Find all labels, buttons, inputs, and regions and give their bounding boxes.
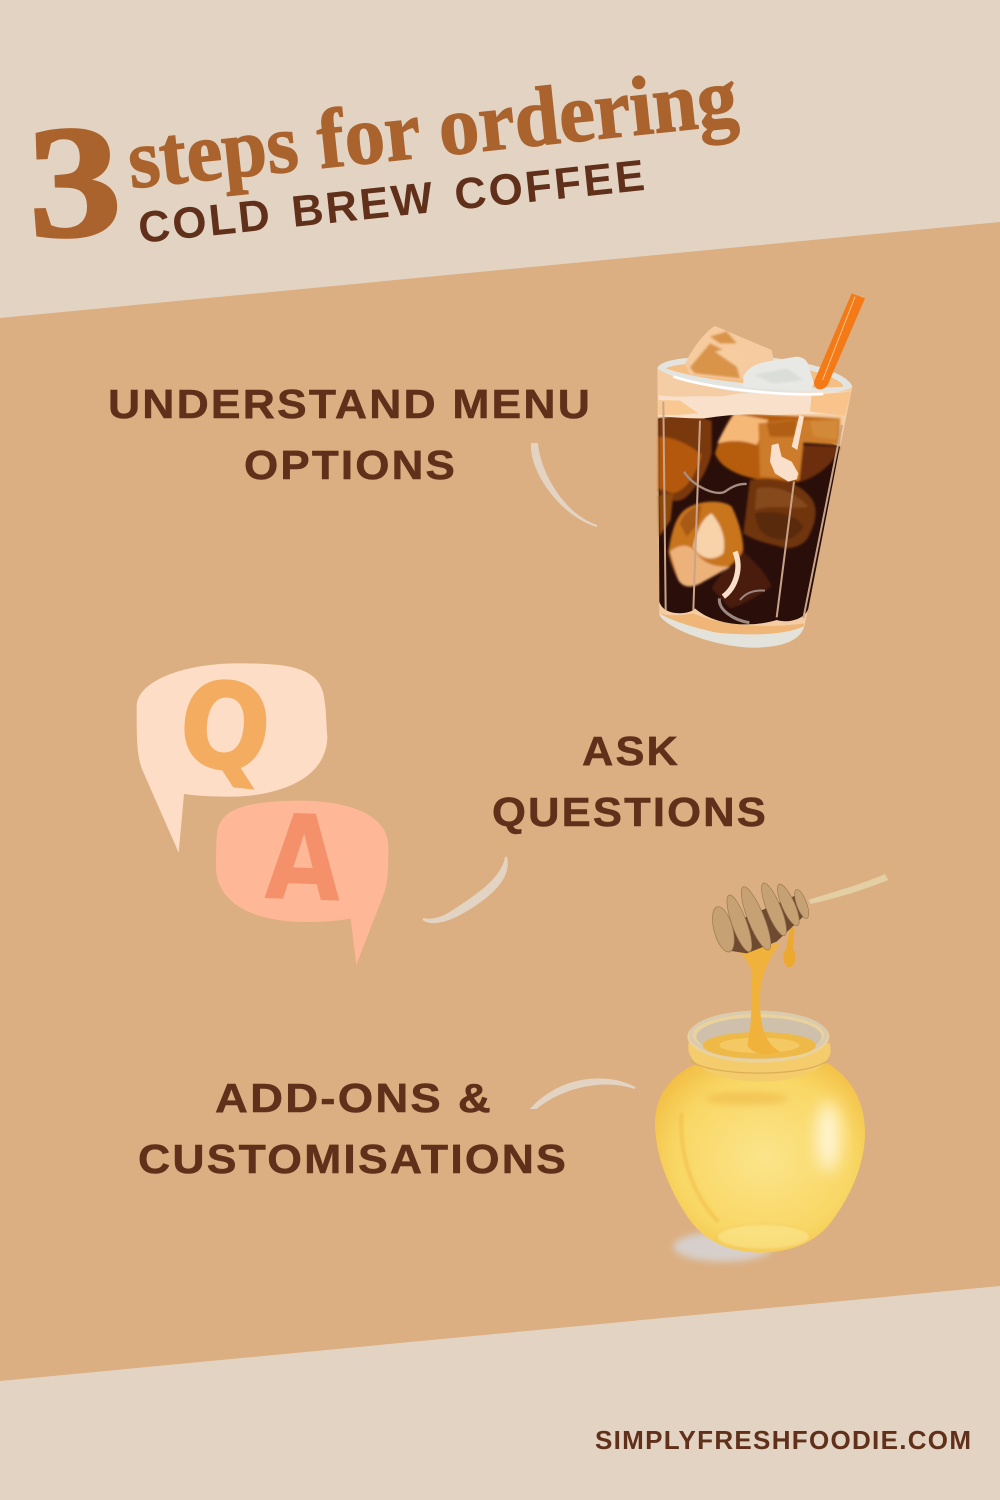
step 3 label: ADD-ONS & <box>215 1075 493 1121</box>
numeral 3: 3 <box>25 93 124 272</box>
subheading: cold brew coffee: COLD BREW COFFEE <box>136 151 649 253</box>
arrow stroke 1 <box>532 444 597 526</box>
tan diagonal panel <box>0 222 1000 1381</box>
step 2 label <box>492 728 768 835</box>
heading: steps for ordering: steps for ordering <box>123 50 742 207</box>
Q bubble <box>137 663 327 853</box>
icon: honey jar and dipper <box>655 874 888 1262</box>
step 3 label <box>138 1075 568 1182</box>
Q letter: Q <box>173 655 277 801</box>
website footer: SIMPLYFRESHFOODIE.COM <box>595 1425 971 1455</box>
arrow stroke 2 <box>423 857 507 922</box>
A letter: A <box>263 788 344 929</box>
title <box>25 50 742 272</box>
icon: iced coffee glass <box>657 293 865 648</box>
step 2 label: QUESTIONS <box>492 789 768 835</box>
step 1 label: OPTIONS <box>244 442 457 488</box>
icon: Q and A speech bubbles <box>137 655 388 965</box>
step 3 label: CUSTOMISATIONS <box>138 1136 568 1182</box>
step 1 label <box>108 381 592 488</box>
arrow stroke 3 <box>532 1079 635 1108</box>
step 2 label: ASK <box>582 728 680 774</box>
step 1 label: UNDERSTAND MENU <box>108 381 592 427</box>
A bubble <box>216 801 388 965</box>
